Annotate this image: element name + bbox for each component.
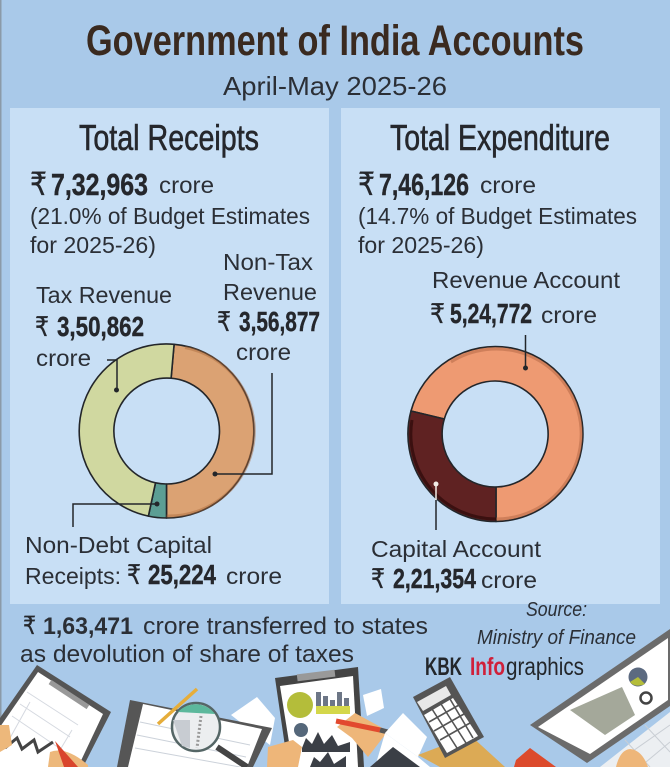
label: revenue account: ₹ xyxy=(430,299,445,330)
label: non-debt capital receipts: Non-Debt Capital xyxy=(25,532,212,558)
label: revenue account xyxy=(430,267,621,330)
leader: non-debt capital receipts xyxy=(73,502,160,527)
expenditure budget share: (14.7% of Budget Estimates xyxy=(358,203,637,229)
icon: white sheets xyxy=(363,689,430,767)
label: non-tax revenue: 3,56,877 xyxy=(239,306,320,337)
icon: chart clipboard xyxy=(275,667,364,767)
illustration: desk with clipboards, calculator and laptop xyxy=(0,629,670,767)
total receipts value: crore xyxy=(159,172,214,198)
total expenditure value: crore xyxy=(480,172,536,198)
KBK Infographics logo xyxy=(425,653,584,681)
total receipts value xyxy=(30,165,214,203)
icon: hand with red pen xyxy=(267,713,388,767)
label: capital account: Capital Account xyxy=(371,536,542,562)
leader: tax revenue xyxy=(107,360,119,392)
heading: total expenditure: Total Expenditure xyxy=(390,117,610,158)
icon: red object xyxy=(514,748,556,767)
total receipts value: 7,32,963 xyxy=(51,167,148,202)
icon: white paper xyxy=(231,697,275,745)
label: tax revenue: ₹ xyxy=(35,312,49,343)
leader: capital account xyxy=(434,482,438,530)
label: non-debt capital receipts xyxy=(25,532,282,591)
receipts budget share xyxy=(30,203,310,258)
icon: notebook xyxy=(117,700,272,767)
source credit: Ministry of Finance xyxy=(477,627,636,649)
label: capital account: crore xyxy=(481,567,537,593)
label: tax revenue: crore xyxy=(36,345,91,371)
label: revenue account: Revenue Account xyxy=(432,267,621,293)
label: non-tax revenue: Non-Tax xyxy=(223,249,314,275)
icon: laptop xyxy=(530,629,670,767)
label: non-debt capital receipts: 25,224 xyxy=(148,559,216,590)
icon: calculator xyxy=(413,677,484,758)
label: capital account: 2,21,354 xyxy=(393,563,476,594)
leader: revenue account xyxy=(523,335,528,370)
expenditure budget share xyxy=(358,203,637,258)
label: revenue account: 5,24,772 xyxy=(450,298,532,329)
panel: total receipts xyxy=(10,108,329,604)
icon: clipboard with zigzag chart xyxy=(0,665,111,767)
subtitle: April-May 2025-26 xyxy=(223,71,447,101)
donut chart: expenditure xyxy=(408,347,583,522)
label: non-tax revenue: Revenue xyxy=(223,279,317,305)
total expenditure value: 7,46,126 xyxy=(379,167,469,202)
label: capital account xyxy=(371,536,542,595)
label: non-debt capital receipts: ₹ xyxy=(127,560,141,591)
label: tax revenue xyxy=(35,282,172,371)
label: tax revenue: Tax Revenue xyxy=(36,282,172,308)
icon: sleeve xyxy=(370,747,420,767)
panel: total expenditure xyxy=(341,108,660,604)
donut chart: receipts xyxy=(79,344,254,518)
label: non-tax revenue: ₹ xyxy=(217,307,231,338)
icon: magnifying glass xyxy=(172,703,247,767)
receipts budget share: (21.0% of Budget Estimates xyxy=(30,203,310,229)
label: non-tax revenue: crore xyxy=(236,339,291,365)
devolution note: crore transferred to states xyxy=(143,613,428,640)
expenditure budget share: for 2025-26) xyxy=(358,232,484,258)
total receipts value: ₹ xyxy=(30,165,47,203)
label: tax revenue: 3,50,862 xyxy=(57,311,144,342)
label: non-debt capital receipts: Receipts: xyxy=(25,563,121,589)
KBK Infographics logo: graphics xyxy=(506,653,584,681)
source credit: Source: xyxy=(526,599,587,621)
icon: folder xyxy=(418,735,505,767)
label: non-tax revenue xyxy=(217,249,320,365)
total expenditure value xyxy=(358,165,536,203)
heading: total receipts: Total Receipts xyxy=(79,117,259,158)
leader: non-tax revenue xyxy=(212,373,272,476)
KBK Infographics logo: KBK xyxy=(425,653,462,681)
icon: pencil xyxy=(158,689,197,724)
total expenditure value: ₹ xyxy=(358,165,375,203)
label: capital account: ₹ xyxy=(371,564,385,595)
devolution note: as devolution of share of taxes xyxy=(20,641,354,668)
receipts budget share: for 2025-26) xyxy=(30,232,156,258)
devolution note xyxy=(20,611,428,668)
label: revenue account: crore xyxy=(541,302,597,328)
KBK Infographics logo: Info xyxy=(470,653,505,681)
label: non-debt capital receipts: crore xyxy=(226,563,282,589)
source credit xyxy=(477,599,636,649)
devolution note: ₹ xyxy=(23,611,36,640)
devolution note: 1,63,471 xyxy=(43,613,133,640)
